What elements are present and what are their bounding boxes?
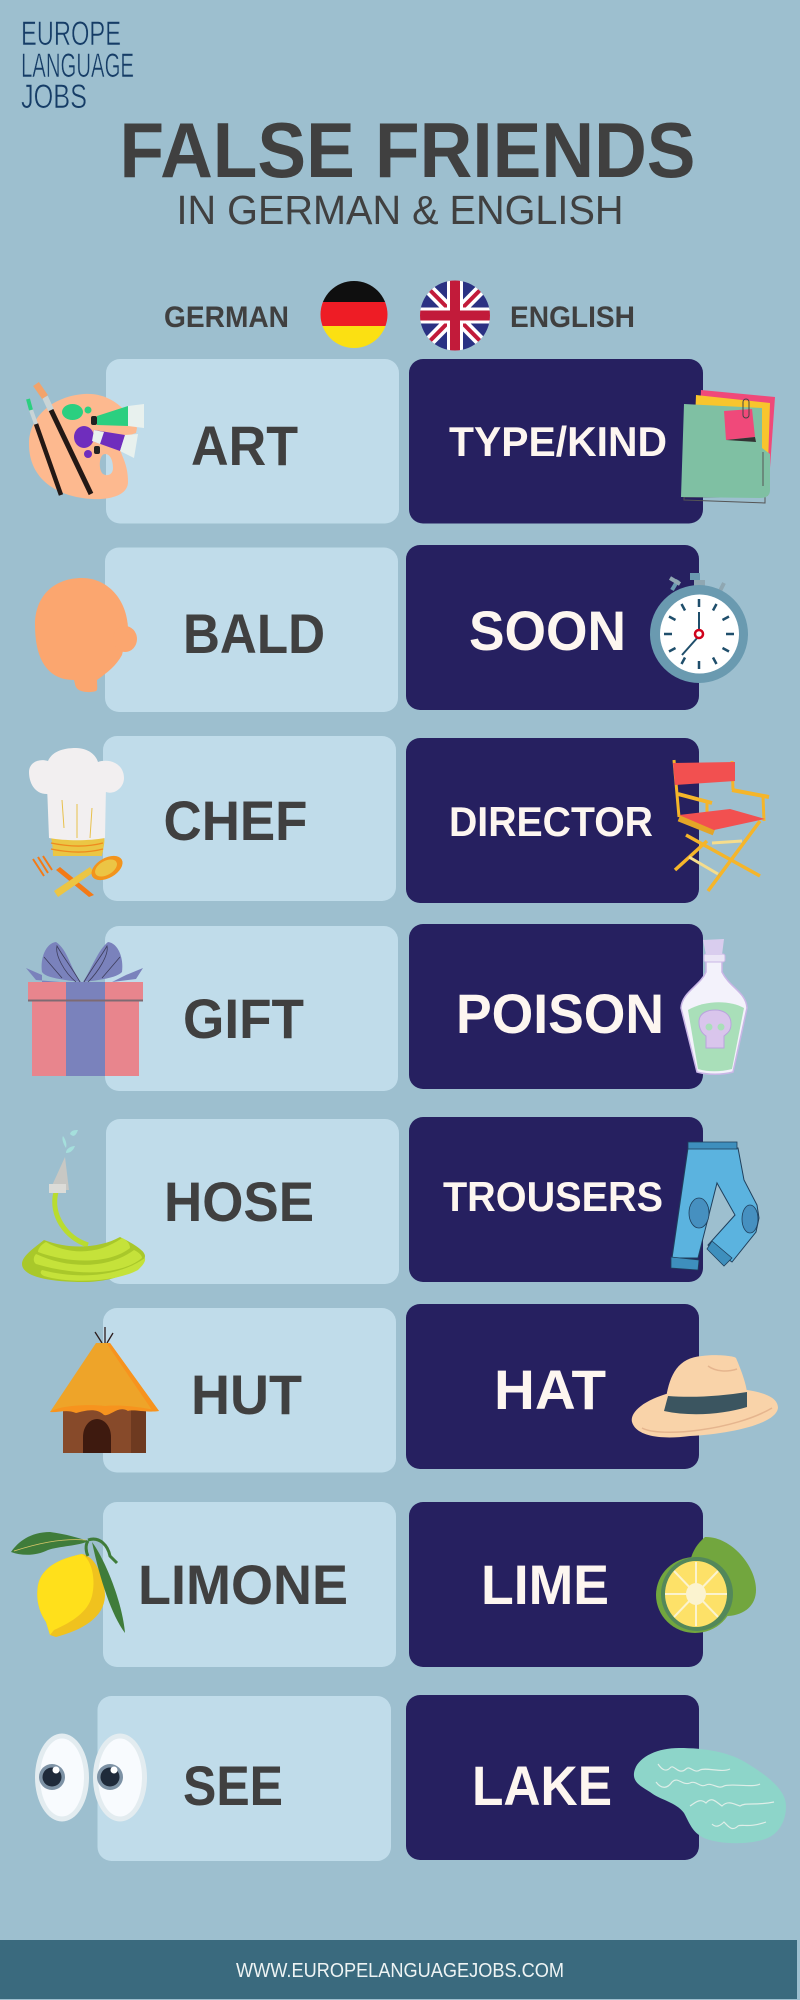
footer bar: WWW.EUROPELANGUAGEJOBS.COM (236, 1960, 564, 1982)
column header: English (420, 280, 635, 351)
card: TROUSERS: TROUSERS (443, 1173, 663, 1220)
logo: Europe Language Jobs: LANGUAGE (21, 47, 134, 85)
card: HUT: HUT (191, 1363, 302, 1426)
icon: lemon (11, 1532, 125, 1637)
card: POISON: POISON (456, 982, 664, 1045)
icon: paint palette (28, 384, 144, 499)
card: ART: ART (191, 414, 298, 477)
icon: lime (656, 1537, 756, 1633)
row 1: Art / Type-Kind (28, 359, 775, 524)
card: HAT (406, 1304, 699, 1469)
card: TYPE/KIND (409, 359, 703, 524)
card: HUT (103, 1308, 396, 1472)
card: HOSE (106, 1119, 399, 1284)
card: SEE (98, 1696, 391, 1861)
card: BALD: BALD (183, 602, 325, 665)
card: HAT: HAT (494, 1358, 606, 1421)
logo: Europe Language Jobs (21, 15, 134, 116)
row 4: Gift / Poison (26, 924, 747, 1091)
column header: German (164, 281, 388, 349)
card: CHEF (103, 736, 396, 901)
card: LAKE: LAKE (472, 1754, 612, 1817)
icon: thatched hut (50, 1327, 159, 1453)
card: LIME (409, 1502, 703, 1667)
logo: Europe Language Jobs: JOBS (21, 78, 87, 116)
card: GIFT: GIFT (183, 987, 304, 1050)
row 6: Hut / Hat (50, 1304, 778, 1472)
icon: gift box (26, 942, 143, 1076)
card: TYPE/KIND: TYPE/KIND (449, 418, 667, 465)
icon: poison bottle (681, 939, 747, 1074)
card: DIRECTOR (406, 738, 699, 903)
card: LAKE (406, 1695, 699, 1860)
card: SOON (406, 545, 699, 710)
card: LIMONE (103, 1502, 396, 1667)
row 5: Hose / Trousers (22, 1117, 759, 1284)
card: DIRECTOR: DIRECTOR (449, 798, 653, 845)
card: LIME: LIME (481, 1553, 609, 1616)
card: LIMONE: LIMONE (138, 1553, 348, 1616)
column header: German: GERMAN (164, 301, 289, 334)
icon: chef hat and cutlery (29, 748, 127, 897)
footer bar (0, 1940, 797, 1999)
icon: blue jeans (671, 1142, 759, 1270)
subtitle: IN GERMAN & ENGLISH (176, 187, 624, 233)
card: POISON (409, 924, 703, 1089)
icon: stopwatch (650, 573, 748, 683)
row 7: Limone / Lime (11, 1502, 756, 1667)
card: HOSE: HOSE (164, 1170, 314, 1233)
icon: lake (634, 1748, 786, 1843)
card: SOON: SOON (469, 599, 626, 662)
card: GIFT (105, 926, 398, 1091)
column header: English: ENGLISH (510, 301, 635, 334)
row 3: Chef / Director (29, 736, 769, 903)
icon: director chair (673, 760, 769, 891)
card: BALD (105, 548, 398, 712)
card: SEE: SEE (183, 1754, 283, 1817)
icon: bald head (35, 578, 137, 692)
logo: Europe Language Jobs: EUROPE (21, 15, 121, 53)
card: TROUSERS (409, 1117, 703, 1282)
card: CHEF: CHEF (164, 789, 308, 852)
icon: straw hat (632, 1355, 778, 1437)
row 8: See / Lake (35, 1695, 786, 1861)
card: ART (106, 359, 399, 524)
title: FALSE FRIENDS (120, 106, 696, 194)
icon: eyes (35, 1734, 147, 1822)
icon: folder with notes (681, 390, 775, 503)
icon: garden hose (22, 1130, 145, 1282)
row 2: Bald / Soon (35, 545, 748, 712)
